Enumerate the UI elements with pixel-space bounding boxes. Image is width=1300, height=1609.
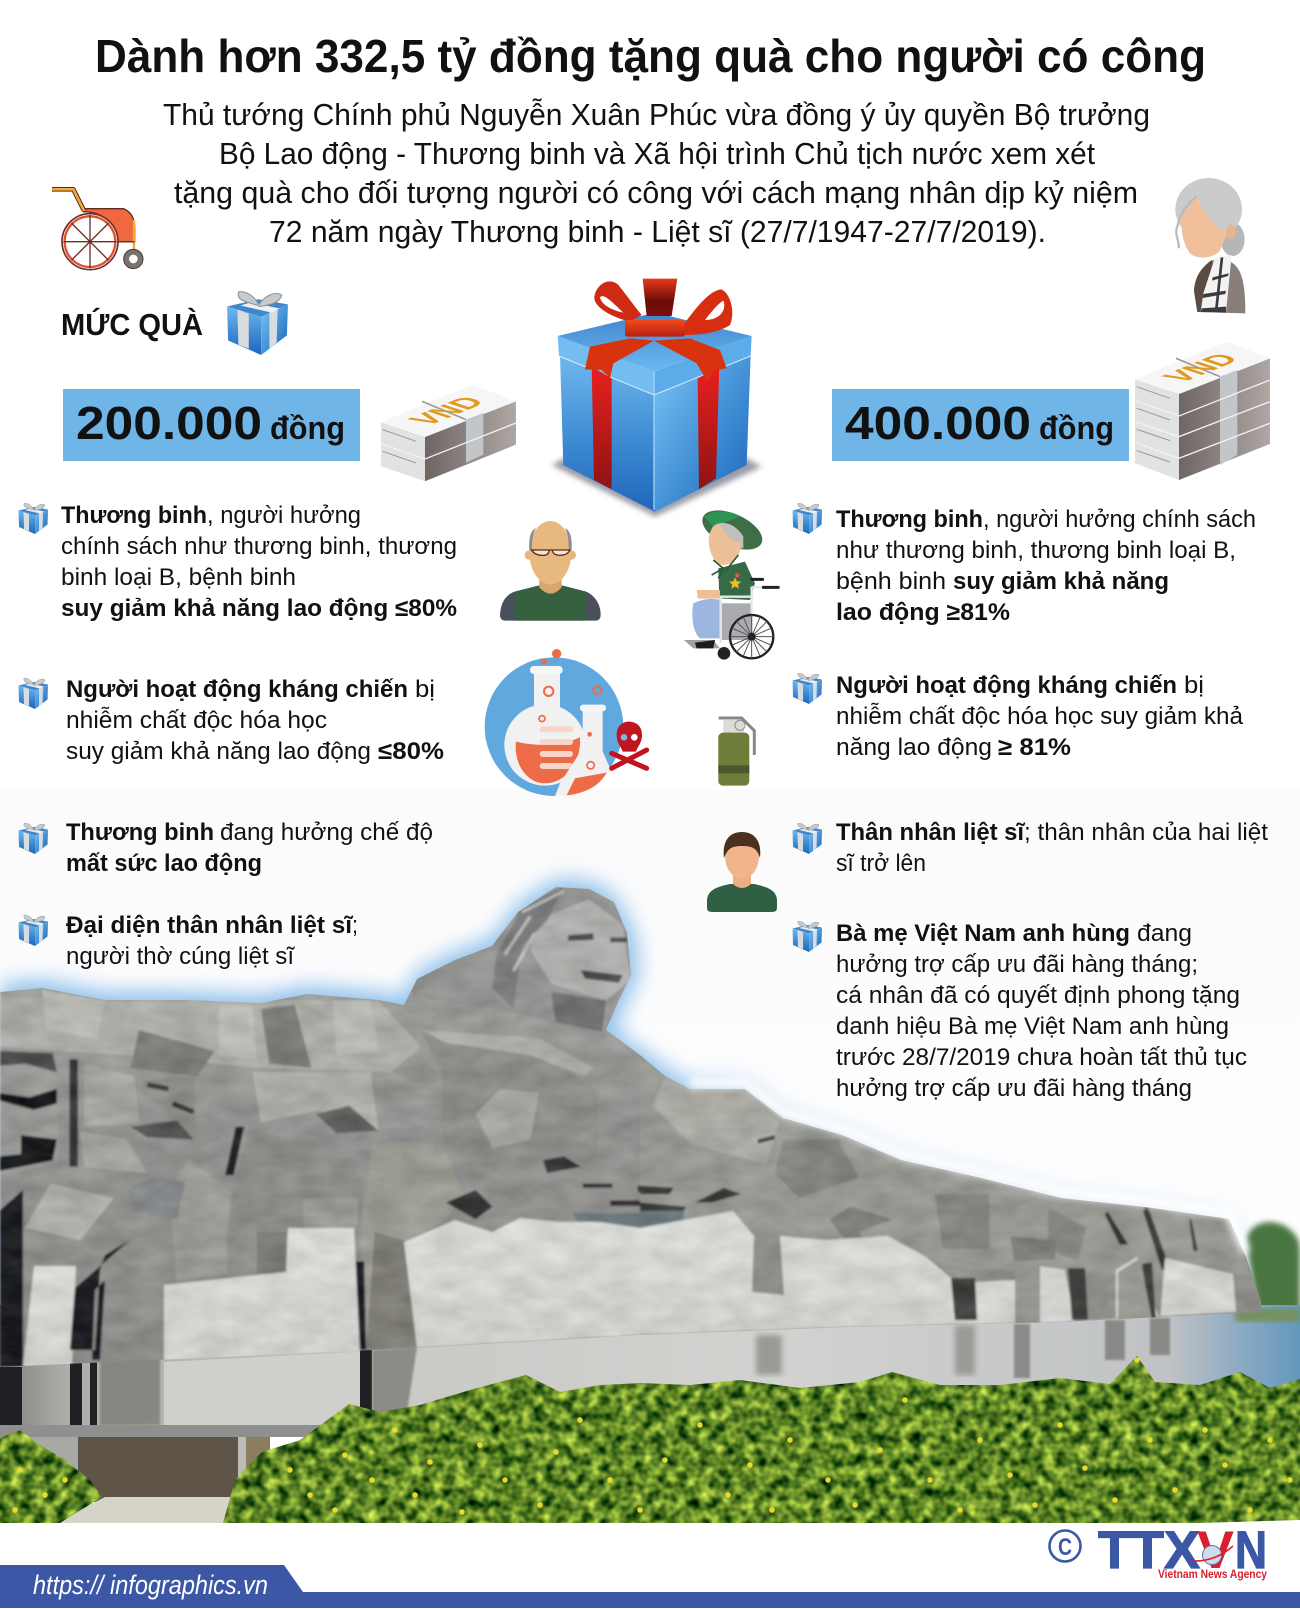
TTXVN logo: V (1197, 1521, 1234, 1580)
title: Dành hơn 332,5 tỷ đồng tặng quà cho người có công (95, 30, 1206, 82)
bullet: right item 1: Thương binh (836, 506, 983, 533)
icon: small gift (227, 292, 288, 355)
soft white fade on right-hand skyline (690, 1083, 1246, 1252)
bullet: right item 4: cá nhân đã có quyết định phong tặng (836, 982, 1240, 1009)
gift red ribbons (585, 338, 727, 489)
small shrub at left (0, 1430, 102, 1523)
bullet: right item 2: Người hoạt động kháng chiến (836, 672, 1177, 699)
bullet: left item 3: Thương binh (66, 819, 214, 846)
footer band with URL tab: https:// infographics.vn (33, 1570, 268, 1600)
bullet: left item 1 (18, 502, 457, 622)
value badge: 200.000 đồng (63, 389, 360, 461)
ledge and wall panel at lakeside (0, 1425, 360, 1523)
bullet: right item 1: suy giảm khả năng (953, 568, 1169, 595)
bullet: left item 2 (18, 676, 444, 765)
yellow flowers on shrubs (15, 1360, 1290, 1512)
TTXVN logo: N (1235, 1521, 1267, 1580)
TTXVN logo: TTX (1098, 1521, 1200, 1580)
bullet: left item 2: Người hoạt động kháng chiến (66, 676, 408, 703)
bullet: right item 2: ≥ 81% (998, 734, 1071, 761)
bullet: right item 3 (792, 819, 1268, 877)
faint sky background (0, 790, 1300, 1523)
icon: VND stack large: VND (1154, 350, 1247, 386)
sky glow around monument (0, 879, 1300, 1340)
bullet: right item 2: nhiễm chất độc hóa học suy giảm khả (836, 703, 1244, 730)
value badge: 400.000 đồng: 400.000 (845, 397, 1031, 449)
large flowering shrubs (223, 1356, 1300, 1523)
intro paragraph (163, 97, 1150, 249)
heading: MỨC QUÀ: MỨC QUÀ (61, 306, 203, 342)
intro paragraph: tặng quà cho đối tượng người có công với cách mạng nhân dịp kỷ niệm (174, 176, 1138, 210)
icon: chemical flasks with skull (485, 649, 647, 796)
bullet: left item 1: chính sách như thương binh, thương (61, 533, 457, 560)
value badge: 200.000 đồng: đồng (270, 410, 345, 446)
gift box faces (558, 313, 752, 512)
gift shadow (552, 457, 762, 517)
TTXVN logo: Vietnam News Agency (1158, 1567, 1267, 1581)
distant tree at far right (1246, 1222, 1300, 1312)
bullet: right item 4: hưởng trợ cấp ưu đãi hàng tháng; (836, 951, 1198, 978)
icon: VND stack small: VND (400, 393, 493, 429)
dark recesses and pillars (0, 1190, 130, 1367)
bullet: right item 1: , người hưởng chính sách (983, 506, 1256, 533)
pale lower concrete walls (23, 1211, 1236, 1367)
icon: veteran in wheelchair (684, 502, 778, 660)
bullet: right item 1: bệnh binh (836, 568, 946, 595)
bullet: right item 2: năng lao động (836, 734, 992, 761)
value badge: 200.000 đồng: 200.000 (76, 397, 262, 449)
mother's head (414, 887, 629, 1014)
footer band with URL tab (0, 1565, 1300, 1608)
value badge: 400.000 đồng: đồng (1039, 410, 1114, 446)
bullet: right item 1: lao động ≥81% (836, 599, 1010, 626)
bullet: left item 2: bị (415, 676, 435, 703)
bullet: left item 1: binh loại B, bệnh binh (61, 564, 296, 591)
bullet: left item 1: suy giảm khả năng lao động ≤80% (61, 595, 457, 622)
water with reflections (0, 1305, 1300, 1427)
icon: wheelchair (52, 189, 143, 270)
intro paragraph: 72 năm ngày Thương binh - Liệt sĩ (27/7/1947-27/7/2019). (269, 215, 1046, 249)
bullet: right item 4 (792, 920, 1247, 1102)
bullet: left item 2: ≤80% (378, 738, 444, 765)
intro paragraph: Bộ Lao động - Thương binh và Xã hội trình Chủ tịch nước xem xét (219, 137, 1096, 171)
bullet: left item 4 (18, 912, 358, 970)
bullet: left item 3: mất sức lao động (66, 850, 262, 877)
icon: bald man with glasses (500, 521, 601, 621)
bullet: right item 3: Thân nhân liệt sĩ (836, 819, 1025, 846)
bullet: right item 2: bị (1184, 672, 1204, 699)
bullet: right item 1: như thương binh, thương binh loại B, (836, 537, 1236, 564)
bullet: left item 2: nhiễm chất độc hóa học (66, 707, 327, 734)
bullet: left item 3: đang hưởng chế độ (220, 819, 433, 846)
bullet: right item 1 (792, 503, 1256, 626)
TTXVN logo (1050, 1521, 1267, 1581)
bullet: right item 4: trước 28/7/2019 chưa hoàn tất thủ tục (836, 1044, 1247, 1071)
icon: elderly woman (1175, 178, 1245, 313)
left half carvings (0, 883, 660, 1350)
bullet: left item 1: , người hưởng (207, 502, 361, 529)
photo: Mẹ Việt Nam Anh hùng monument over water with shrubs (0, 879, 1300, 1523)
bullet: right item 4: Bà mẹ Việt Nam anh hùng (836, 920, 1130, 947)
bullet: right item 4: danh hiệu Bà mẹ Việt Nam anh hùng (836, 1013, 1229, 1040)
bullet: right item 4: đang (1137, 920, 1192, 947)
bullet: left item 3 (18, 819, 433, 877)
icon: central gift box (552, 279, 762, 517)
bullet: right item 2 (792, 672, 1244, 761)
icon: young man (707, 832, 777, 912)
bullet: right item 3: sĩ trở lên (836, 850, 926, 877)
bullet: left item 4: người thờ cúng liệt sĩ (66, 943, 295, 970)
gift bow (594, 279, 732, 337)
monument stone mass (0, 880, 1300, 1370)
icon: VND stack small (381, 385, 516, 481)
icon: grenade (718, 718, 754, 786)
TTXVN logo: C (1058, 1534, 1072, 1561)
value badge: 400.000 đồng (832, 389, 1129, 461)
icon: VND stack large (1135, 342, 1270, 480)
bullet: right item 4: hưởng trợ cấp ưu đãi hàng tháng (836, 1075, 1192, 1102)
intro paragraph: Thủ tướng Chính phủ Nguyễn Xuân Phúc vừa đồng ý ủy quyền Bộ trưởng (163, 97, 1150, 132)
bullet: left item 4: Đại diện thân nhân liệt sĩ (66, 912, 353, 939)
stone texture overlay (0, 880, 1300, 1370)
bullet: left item 4: ; (352, 912, 358, 939)
right half carvings (638, 1076, 1248, 1274)
bullet: left item 2: suy giảm khả năng lao động (66, 738, 371, 765)
bullet: left item 1: Thương binh (61, 502, 207, 529)
bullet: right item 3: ; thân nhân của hai liệt (1024, 819, 1268, 846)
